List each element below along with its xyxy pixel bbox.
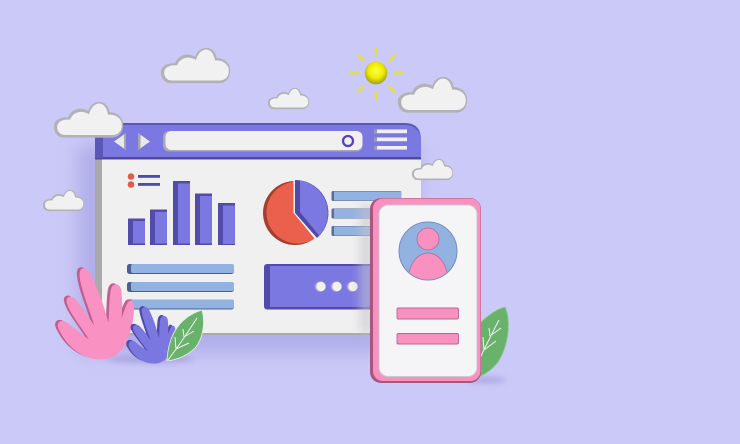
back and forward arrows [114,133,150,150]
plant: left green leaf [167,310,204,361]
pie chart [263,180,328,245]
text rows under bars [127,264,234,310]
phone casing [370,198,481,383]
browser window [95,123,421,335]
pie legend rows [332,191,402,236]
phone [370,198,481,383]
profile avatar [398,222,458,280]
cloud: small left [43,190,84,211]
browser soft shadow [78,145,418,353]
search bar [163,131,362,152]
cloud: top centre-left [162,49,229,82]
cloud: top left over browser [55,103,122,137]
cloud: right of sun [399,78,466,112]
window body [95,155,421,335]
plant: right green leaf [476,307,508,378]
window header bar [95,123,421,160]
cloud: small right [412,159,453,180]
right leaf shadow [466,377,506,383]
plant: pink leaves [56,268,133,358]
plant: blue leaves [127,307,174,363]
button with dots [264,264,379,310]
illustration: browser dashboard and phone profile [42,48,509,385]
cloud: small centre [268,88,309,109]
legend [128,173,160,188]
icon: sun [349,48,403,100]
profile lines [397,308,458,344]
menu icon [374,130,407,150]
bar chart [128,181,235,245]
phone shadow on browser [360,205,374,333]
plant shadow [105,355,195,363]
